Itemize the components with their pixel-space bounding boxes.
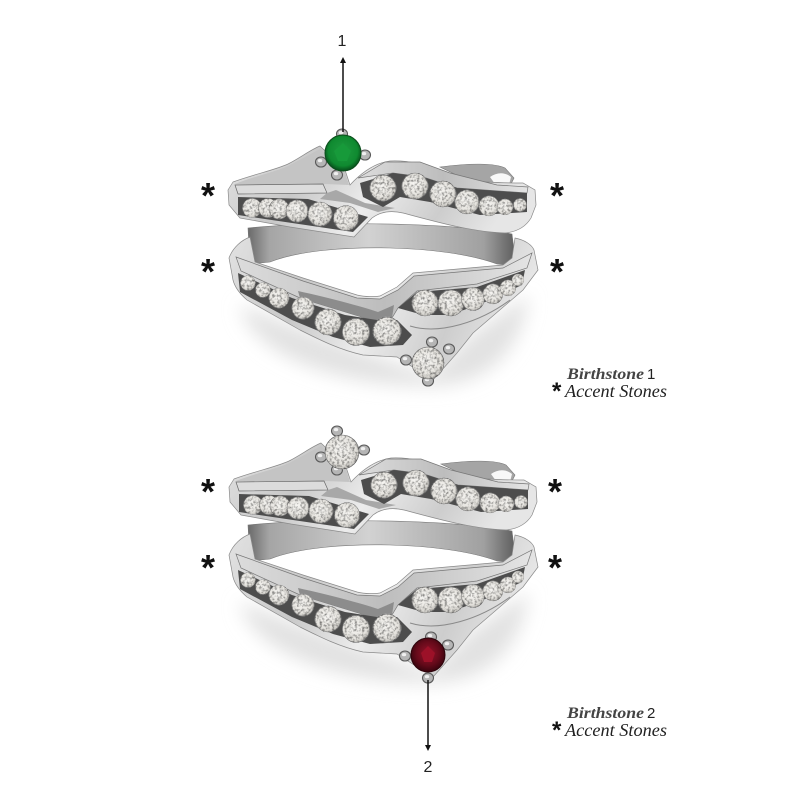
label 2: 2: [424, 759, 433, 776]
legend for ring set 1: Birthstone: [566, 366, 644, 383]
upper ring guard: [228, 146, 536, 237]
lower ring guard: [229, 224, 538, 386]
birthstone 1: emerald with prongs: [316, 129, 370, 180]
upper ring guard: [229, 443, 537, 534]
lower ring guard: [229, 521, 538, 683]
label 1: 1: [338, 33, 347, 50]
birthstone 2: ruby with prongs: [400, 632, 454, 683]
legend for ring set 2: *: [552, 717, 562, 744]
legend for ring set 1: *: [552, 378, 562, 405]
arrow to birthstone 1: [340, 57, 346, 132]
legend for ring set 1: 1: [647, 366, 655, 383]
arrow to birthstone 2: [425, 680, 431, 751]
accent markers set 1, lower right: *: [550, 251, 564, 292]
accent markers set 2, lower right: *: [548, 547, 562, 588]
accent markers set 1, lower left: *: [201, 251, 215, 292]
white accent stone with prongs: [316, 426, 370, 475]
panel: ring set with birthstone 1: [228, 129, 538, 386]
white accent stone with prongs: [400, 337, 454, 386]
accent markers set 1, upper right: *: [550, 175, 564, 216]
accent markers set 2, lower left: *: [201, 547, 215, 588]
legend for ring set 2: 2: [647, 705, 655, 722]
accent markers set 2, upper right: *: [548, 471, 562, 512]
legend for ring set 1: [552, 366, 667, 405]
legend for ring set 2: [552, 705, 667, 744]
accent markers set 1, upper left: *: [201, 175, 215, 216]
legend for ring set 2: Accent Stones: [564, 720, 667, 740]
legend for ring set 1: Accent Stones: [564, 381, 667, 401]
accent markers set 2, upper left: *: [201, 471, 215, 512]
panel: ring set with birthstone 2: [229, 426, 538, 683]
legend for ring set 2: Birthstone: [566, 705, 644, 722]
